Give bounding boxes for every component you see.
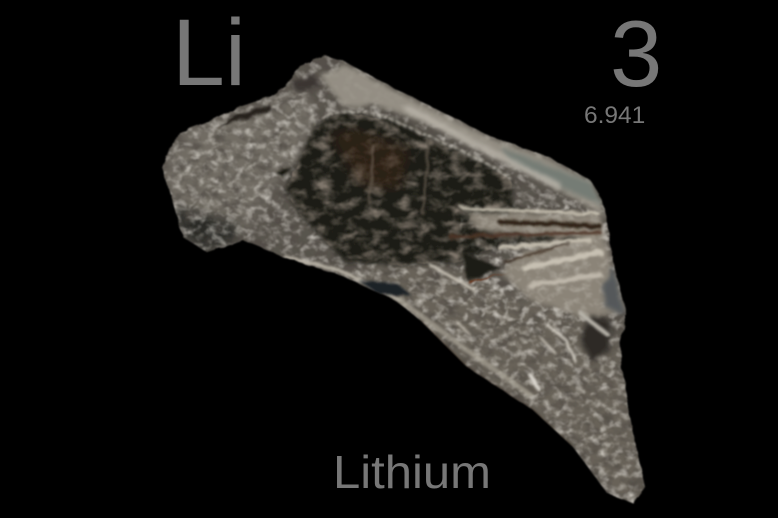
lithium metal specimen <box>150 50 660 510</box>
dark bottom rim <box>415 320 573 447</box>
blue-black patch <box>358 280 412 296</box>
dark pocket right <box>580 314 612 362</box>
lower speckled body <box>362 264 642 496</box>
edge highlight on dark face <box>322 111 512 180</box>
dark notches <box>218 105 273 128</box>
noise texture <box>164 90 644 496</box>
ridges <box>285 145 608 395</box>
left rough end <box>163 92 318 236</box>
element symbol: Li <box>172 0 246 106</box>
atomic mass: 6.941 <box>584 102 645 129</box>
lower left dark end <box>172 205 240 252</box>
bright band on top face <box>405 107 560 187</box>
base body <box>150 50 660 510</box>
greenish upper right facet <box>500 147 602 205</box>
brown tint in dark face <box>330 130 410 190</box>
ridged silver fan <box>466 212 625 320</box>
grey right facet <box>602 265 625 315</box>
atomic number: 3 <box>610 1 662 106</box>
dark wedge <box>462 252 500 281</box>
dark central face <box>284 108 580 269</box>
element name: Lithium <box>333 446 491 498</box>
top light face <box>320 65 606 218</box>
